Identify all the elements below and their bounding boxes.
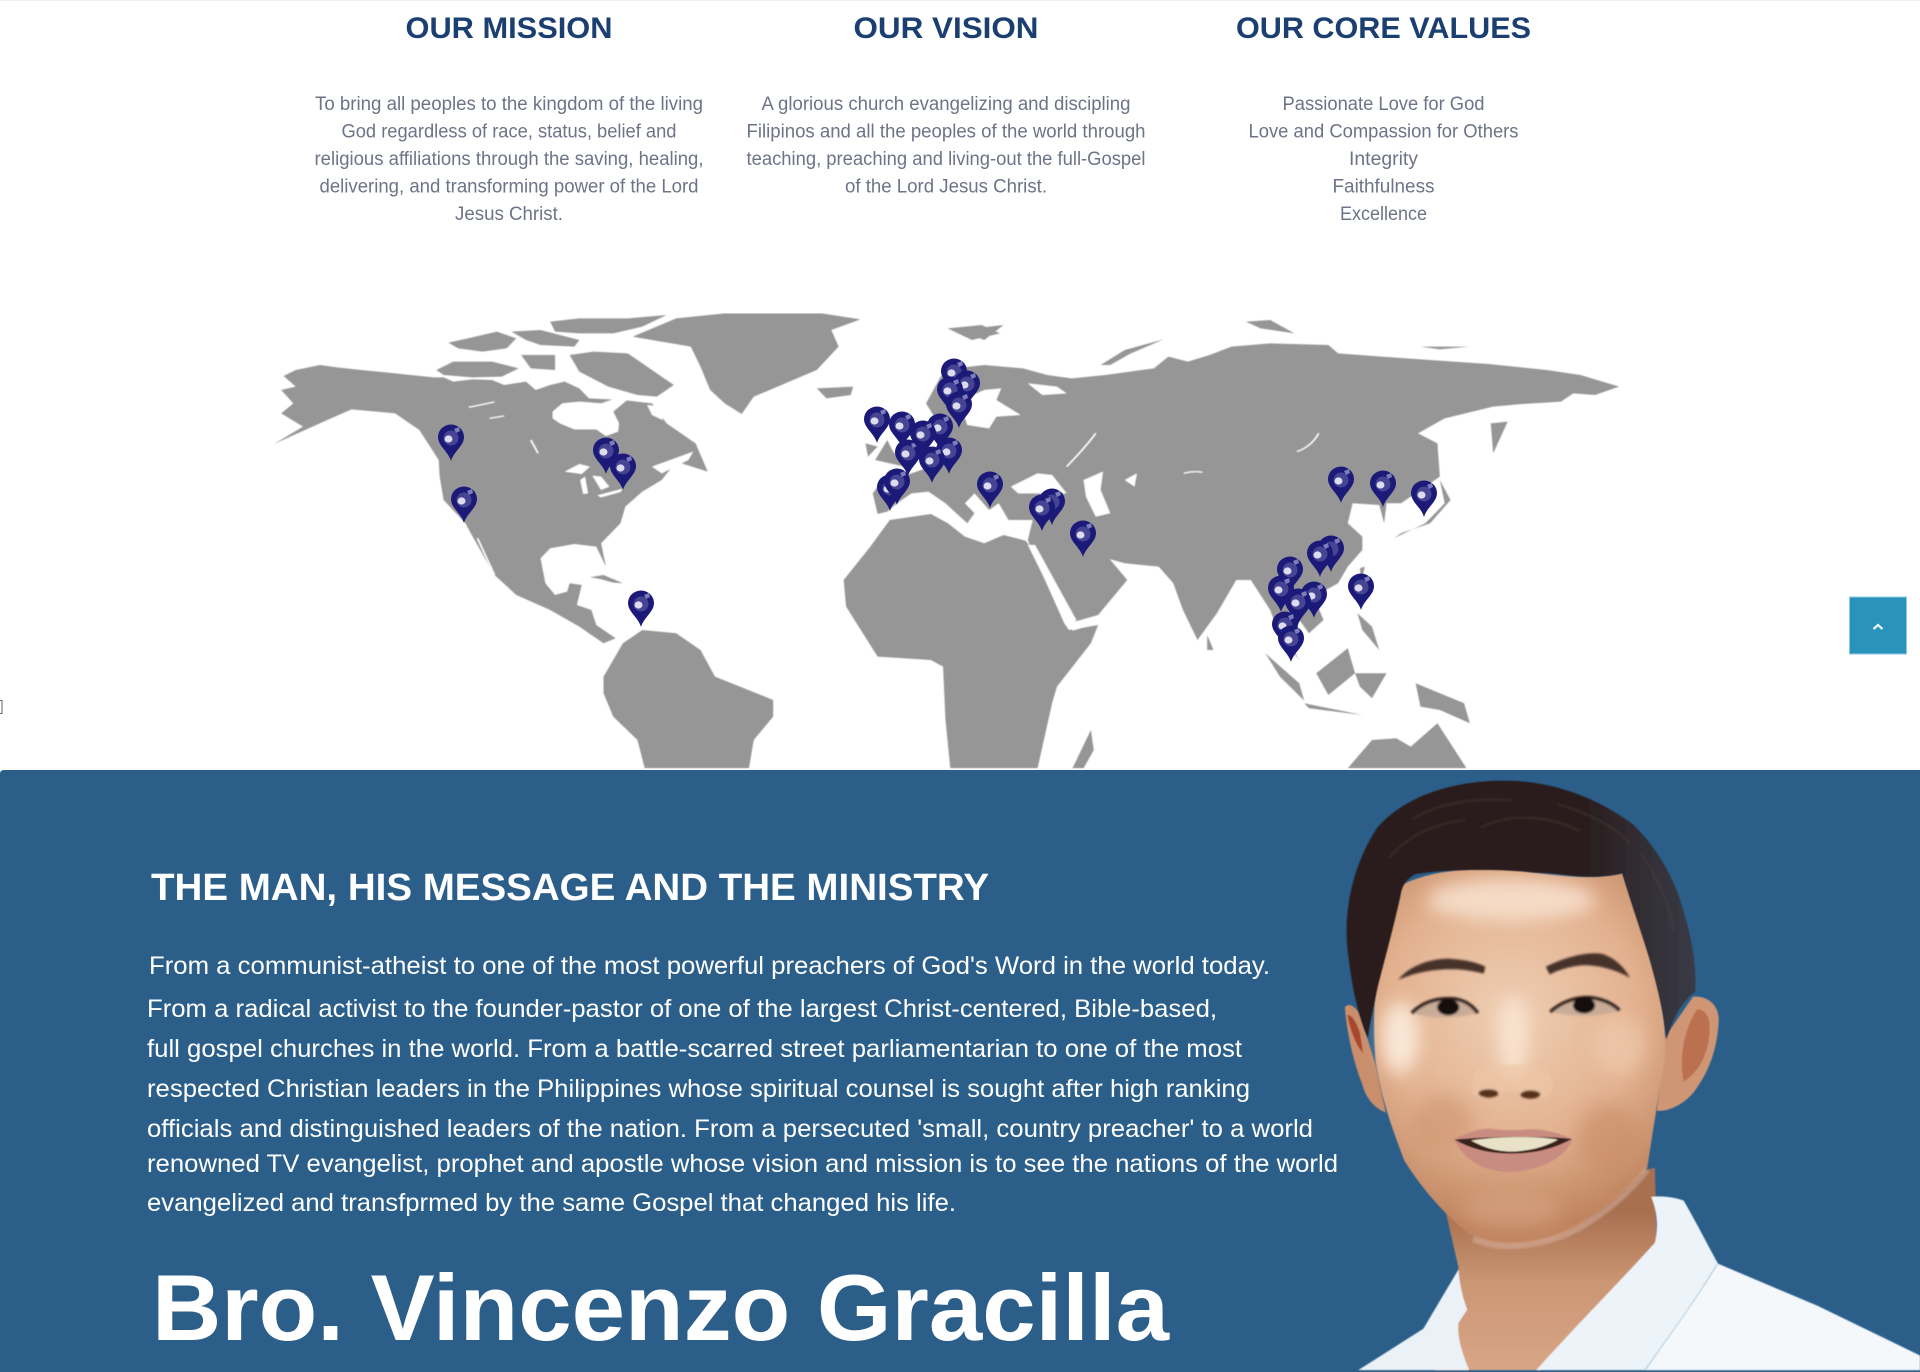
text: core values list: Faithfulness: [1332, 176, 1434, 198]
hair: [1347, 781, 1696, 1040]
text: biography: From a radical activist to the founder-pastor of one of the largest Christ-centered, Bible-based,: [147, 995, 1217, 1023]
text: mission statement: [314, 94, 704, 225]
text: core values list: Integrity: [1349, 149, 1419, 170]
text: biography: full gospel churches in the world. From a battle-scarred street parliamentarian to one of the most: [147, 1035, 1242, 1063]
portrait photo: [1345, 781, 1920, 1370]
icon: small clipped marker at left edge: [0, 700, 2, 714]
text: vision statement: of the Lord Jesus Christ.: [845, 176, 1047, 198]
text: biography: respected Christian leaders in the Philippines whose spiritual counsel is sought after high ranking: [147, 1075, 1250, 1103]
location pins: [438, 358, 1437, 662]
mouth: [1454, 1129, 1573, 1172]
eyes: [1412, 997, 1619, 1018]
text: mission statement: Jesus Christ.: [455, 204, 563, 225]
neck: [1435, 1168, 1657, 1370]
scroll to top button: [1850, 597, 1906, 654]
jaw light rim: [1473, 1170, 1647, 1246]
hair strands: [1389, 800, 1674, 931]
text: biography: From a communist-atheist to one of the most powerful preachers of God's Word in the world today.: [149, 952, 1270, 980]
heading: our mission: OUR MISSION: [406, 12, 612, 45]
ears: [1345, 997, 1719, 1113]
text: vision statement: [746, 94, 1146, 198]
text: core values list: Love and Compassion for Others: [1248, 122, 1518, 142]
text: mission statement: delivering, and transforming power of the Lord: [320, 176, 698, 198]
text: core values list: Excellence: [1340, 204, 1427, 225]
text: mission statement: God regardless of race, status, belief and: [342, 122, 676, 142]
heading: our vision: OUR VISION: [854, 12, 1038, 45]
heading: the man, his message and the ministry: THE MAN, HIS MESSAGE AND THE MINISTRY: [151, 867, 989, 909]
text: biography: [147, 952, 1338, 1217]
text: vision statement: Filipinos and all the peoples of the world through: [746, 122, 1146, 142]
face: [1374, 869, 1665, 1245]
text: vision statement: A glorious church evangelizing and discipling: [762, 94, 1130, 115]
panel: our mission: [314, 12, 704, 225]
text: vision statement: teaching, preaching and living-out the full-Gospel: [746, 149, 1146, 170]
heading: our core values: OUR CORE VALUES: [1236, 12, 1531, 45]
nose: [1471, 1064, 1553, 1099]
text: core values list: Passionate Love for God: [1282, 94, 1484, 115]
text: mission statement: religious affiliations through the saving, healing,: [314, 149, 704, 170]
eyebrows: [1398, 953, 1630, 980]
shirt: [1358, 1196, 1920, 1370]
panel: our vision: [746, 12, 1146, 198]
world map: [274, 313, 1619, 768]
panel: the man, his message and the ministry: [0, 770, 1920, 1372]
text: biography: evangelized and transfprmed by the same Gospel that changed his life.: [147, 1189, 956, 1217]
panel: our core values: [1236, 12, 1531, 225]
text: biography: officials and distinguished leaders of the nation. From a persecuted 'small, country preacher' to a world: [147, 1115, 1313, 1143]
text: core values list: [1248, 94, 1518, 225]
facial highlights: [1381, 879, 1645, 1229]
name: Bro. Vincenzo Gracilla: Bro. Vincenzo Gracilla: [152, 1255, 1170, 1360]
text: mission statement: To bring all peoples to the kingdom of the living: [315, 94, 703, 115]
text: biography: renowned TV evangelist, prophet and apostle whose vision and mission is to see the nations of the world: [147, 1150, 1338, 1178]
